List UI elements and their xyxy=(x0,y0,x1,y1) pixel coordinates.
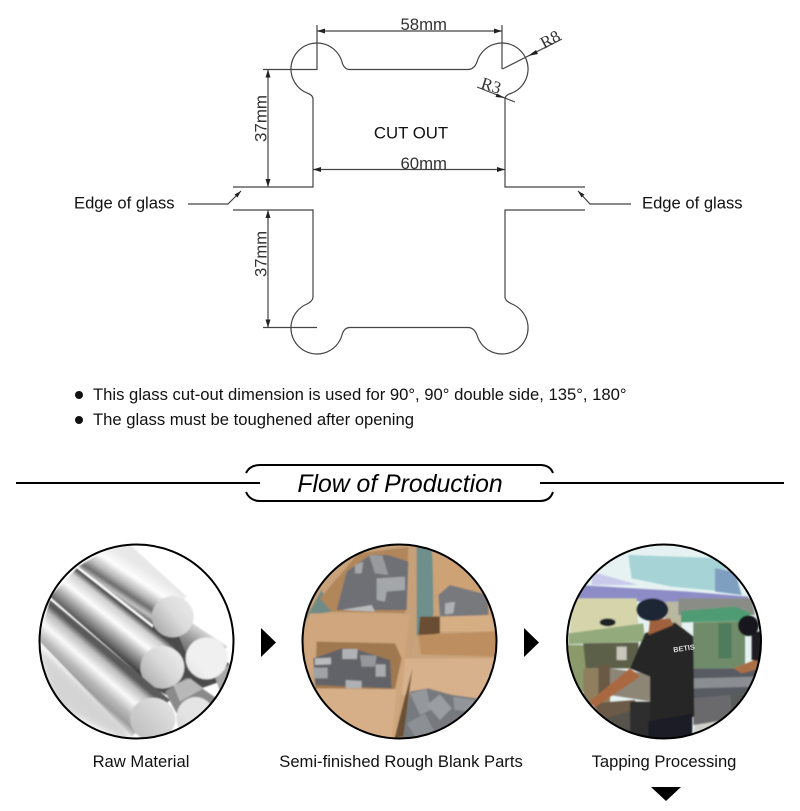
section heading: flow of production xyxy=(16,465,784,501)
right worker xyxy=(733,659,758,674)
shirt logo: BETIS xyxy=(673,642,695,654)
technical drawing: cut-out dimensions xyxy=(74,15,743,354)
rod B xyxy=(50,568,177,677)
arrow: continue downward xyxy=(651,787,681,801)
dimension: R8 xyxy=(502,26,563,69)
dimension: R8: R8 xyxy=(537,26,563,53)
table and base xyxy=(592,700,637,719)
dark gaps between rods xyxy=(140,622,233,698)
main worker xyxy=(590,668,640,708)
caption: tapping processing: Tapping Processing xyxy=(592,752,736,771)
callout: edge of glass, right: Edge of glass xyxy=(642,194,743,212)
dimension: 58mm xyxy=(263,15,502,70)
bullet notes xyxy=(75,385,627,429)
rod C xyxy=(38,600,170,737)
callout: edge of glass, right xyxy=(578,191,743,212)
arrow: blanks to tapping xyxy=(524,628,539,657)
rod A xyxy=(78,542,187,625)
dimension: lower 37mm: 37mm xyxy=(252,231,270,277)
right drill press xyxy=(681,607,752,622)
label: cut out: CUT OUT xyxy=(374,124,448,142)
cut-out outline, upper xyxy=(233,43,585,187)
dimension: upper 37mm: 37mm xyxy=(252,95,270,142)
rear right rods xyxy=(178,623,227,678)
left drill press xyxy=(568,623,645,644)
callout: edge of glass, left: Edge of glass xyxy=(74,194,175,212)
photo: semi-finished blanks in boxes xyxy=(302,544,498,740)
dimension: upper 37mm xyxy=(252,70,270,187)
cut-out outline, lower xyxy=(233,210,585,354)
section heading: flow of production: Flow of Production xyxy=(297,471,503,498)
bullet notes: This glass cut-out dimension is used for 90°, 90° double side, 135°, 180° xyxy=(93,385,627,404)
photo: raw material steel rods xyxy=(37,542,235,743)
photo: tapping processing workshop xyxy=(565,544,763,742)
caption: semi-finished rough blank parts: Semi-finished Rough Blank Parts xyxy=(279,752,523,771)
lower left box xyxy=(303,613,410,738)
callout: edge of glass, left xyxy=(74,191,241,212)
dimension: 58mm: 58mm xyxy=(400,15,447,34)
lower right box xyxy=(402,658,494,699)
dimension: 60mm: 60mm xyxy=(400,154,447,173)
dimension: R3: R3 xyxy=(479,74,503,98)
dimension: lower 37mm xyxy=(252,210,317,328)
caption: raw material: Raw Material xyxy=(93,752,189,771)
arrow: raw material to blanks xyxy=(261,628,276,657)
bullet notes: The glass must be toughened after opening xyxy=(93,410,414,429)
dimension: 60mm xyxy=(313,154,505,173)
dimension: R3 xyxy=(477,74,515,102)
